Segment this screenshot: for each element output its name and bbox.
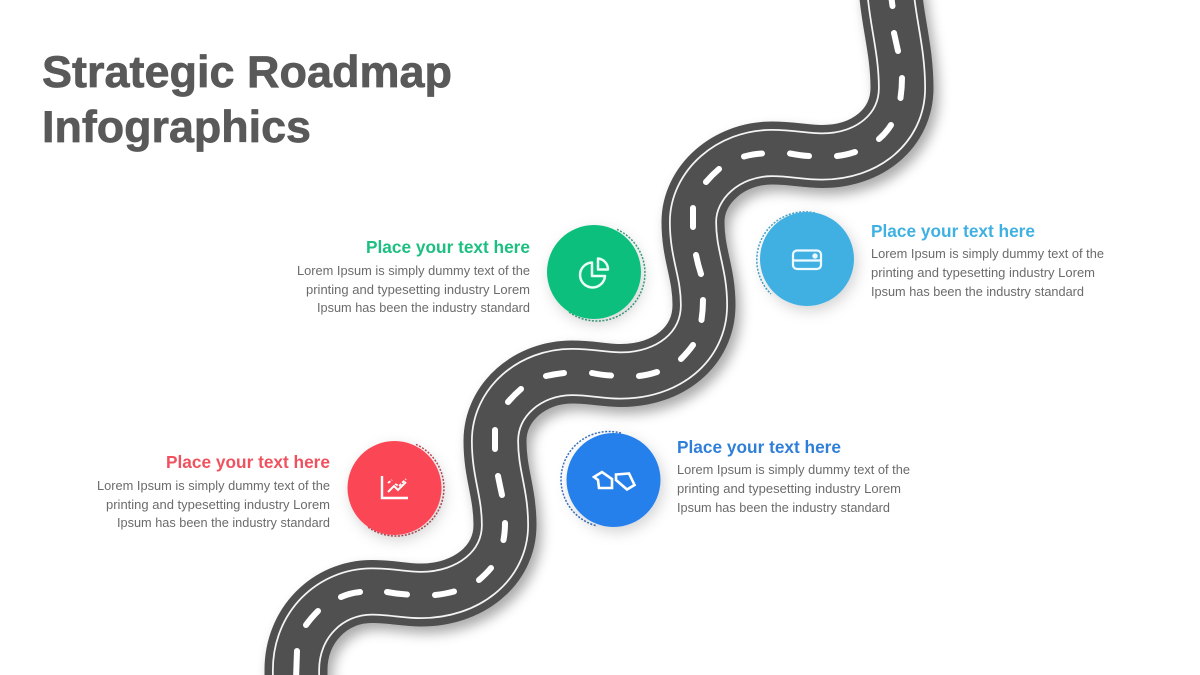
- text block: blue: Place your text here: [677, 437, 841, 457]
- icon: card: [793, 250, 821, 269]
- marker: green: [547, 225, 645, 321]
- text block: sky blue: Place your text here: [871, 221, 1035, 241]
- text block: green: Lorem Ipsum is simply dummy text of the: [297, 264, 530, 278]
- text block: green: Place your text here: [366, 237, 530, 257]
- text block: sky blue: [871, 221, 1104, 299]
- text block: blue: Ipsum has been the industry standard: [677, 501, 890, 515]
- text block: sky blue: Lorem Ipsum is simply dummy text of the: [871, 247, 1104, 261]
- text block: red: Ipsum has been the industry standard: [117, 516, 330, 530]
- marker: blue: [561, 431, 660, 527]
- icon: line chart: [382, 476, 408, 498]
- text block: sky blue: Ipsum has been the industry standard: [871, 285, 1084, 299]
- icon: arrows: [594, 472, 634, 490]
- icon: pie chart: [580, 258, 608, 287]
- text block: green: printing and typesetting industry Lorem: [306, 283, 530, 297]
- marker: red: [348, 441, 444, 536]
- text block: red: [97, 452, 330, 530]
- winding road: [296, 0, 902, 675]
- title: Strategic Roadmap: [42, 48, 452, 97]
- text block: red: Place your text here: [166, 452, 330, 472]
- text block: sky blue: printing and typesetting industry Lorem: [871, 266, 1095, 280]
- text block: green: [297, 237, 530, 315]
- text block: green: Ipsum has been the industry standard: [317, 301, 530, 315]
- title: [42, 48, 452, 152]
- text block: red: printing and typesetting industry Lorem: [106, 498, 330, 512]
- text block: red: Lorem Ipsum is simply dummy text of the: [97, 479, 330, 493]
- text block: blue: Lorem Ipsum is simply dummy text of the: [677, 463, 910, 477]
- title: Infographics: [42, 103, 311, 152]
- text block: blue: [677, 437, 910, 515]
- text block: blue: printing and typesetting industry Lorem: [677, 482, 901, 496]
- marker: sky blue: [757, 212, 854, 306]
